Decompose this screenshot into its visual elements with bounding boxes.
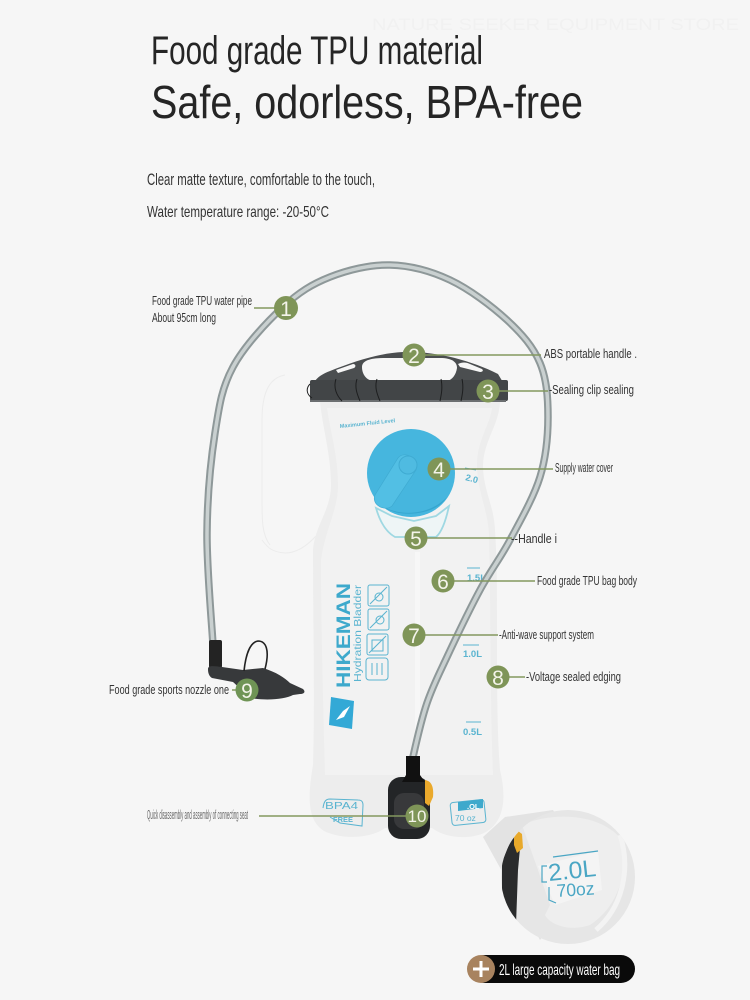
volume marks: 1.0L (463, 649, 482, 660)
capacity label: 70oz (556, 878, 595, 901)
callout 9: 9 (241, 680, 253, 703)
callout 9: Food grade sports nozzle one (109, 682, 229, 697)
brand text (334, 583, 364, 688)
callout 8 (486, 666, 621, 690)
capacity badge: .OL (467, 802, 480, 811)
connecting seat (388, 756, 433, 839)
callout 7: 7 (408, 625, 420, 648)
callout 3: -Sealing clip sealing (549, 382, 634, 397)
callout 8: -Voltage sealed edging (526, 669, 621, 684)
title: Safe, odorless, BPA-free (151, 76, 583, 128)
volume marks: 0.5L (463, 727, 482, 738)
magnified detail (483, 810, 635, 944)
callout 10: 10 (408, 807, 426, 826)
description (147, 170, 375, 221)
callout 1: Food grade TPU water pipe (152, 293, 252, 308)
callout 3: 3 (482, 381, 494, 404)
BPA free badge: FREE (333, 815, 353, 824)
capacity label: 2.0L (547, 855, 597, 887)
callout 7: -Anti-wave support system (499, 627, 594, 642)
callout 10: Quick disassembly and assembly of connecting seat (147, 807, 248, 822)
volume marks: 1.5L (467, 573, 486, 584)
callout 6: 6 (437, 571, 449, 594)
center fold (415, 552, 420, 762)
bladder bag (262, 375, 503, 837)
usage icons (366, 585, 389, 680)
title (151, 29, 583, 128)
sports nozzle (208, 640, 304, 699)
volume marks (463, 468, 486, 738)
bag body (310, 402, 503, 837)
cap handle ring (376, 506, 449, 537)
side hanger outline (262, 375, 316, 553)
callout 1 (152, 293, 298, 325)
description: Clear matte texture, comfortable to the touch, (147, 170, 375, 189)
callout 9 (109, 678, 258, 703)
callout 7 (402, 624, 594, 648)
handle and sealing clip (307, 352, 508, 401)
capacity badge (450, 799, 486, 826)
callout 5 (404, 526, 557, 551)
callout 5: --Handle i (511, 531, 557, 546)
callout 4 (428, 458, 613, 482)
callout 2: ABS portable handle . (544, 346, 637, 361)
fluid level text: Maximum Fluid Level (340, 418, 396, 430)
callout 10 (147, 804, 428, 828)
capacity label (542, 851, 598, 903)
capacity pill (467, 955, 635, 983)
callout 1: About 95cm long (152, 310, 216, 325)
cap strap (374, 455, 417, 508)
callout 4: Supply water cover (555, 460, 613, 475)
callout 6 (432, 570, 637, 594)
description: Water temperature range: -20-50°C (147, 204, 329, 221)
brand text: HIKEMAN (334, 583, 355, 688)
callout 5: 5 (410, 528, 422, 551)
BPA free badge (323, 799, 363, 826)
callout 8: 8 (492, 667, 504, 690)
BPA free badge: BPA4 (325, 800, 358, 812)
callout 4: 4 (433, 459, 445, 482)
callout 6: Food grade TPU bag body (537, 573, 637, 588)
watermark: NATURE SEEKER EQUIPMENT STORE (372, 16, 739, 34)
capacity badge: 70 oz (455, 813, 476, 823)
callout 1: 1 (280, 298, 292, 321)
callout 3 (476, 380, 634, 404)
title: Food grade TPU material (151, 29, 483, 73)
brand text: Hydration Bladder (352, 584, 364, 682)
logo (329, 697, 354, 729)
callout 2: 2 (408, 345, 420, 368)
callout 2 (402, 344, 637, 368)
blue water cover (367, 429, 455, 517)
water hose (207, 265, 548, 757)
capacity pill: 2L large capacity water bag (499, 962, 620, 979)
volume marks: 2.0 (464, 472, 479, 485)
